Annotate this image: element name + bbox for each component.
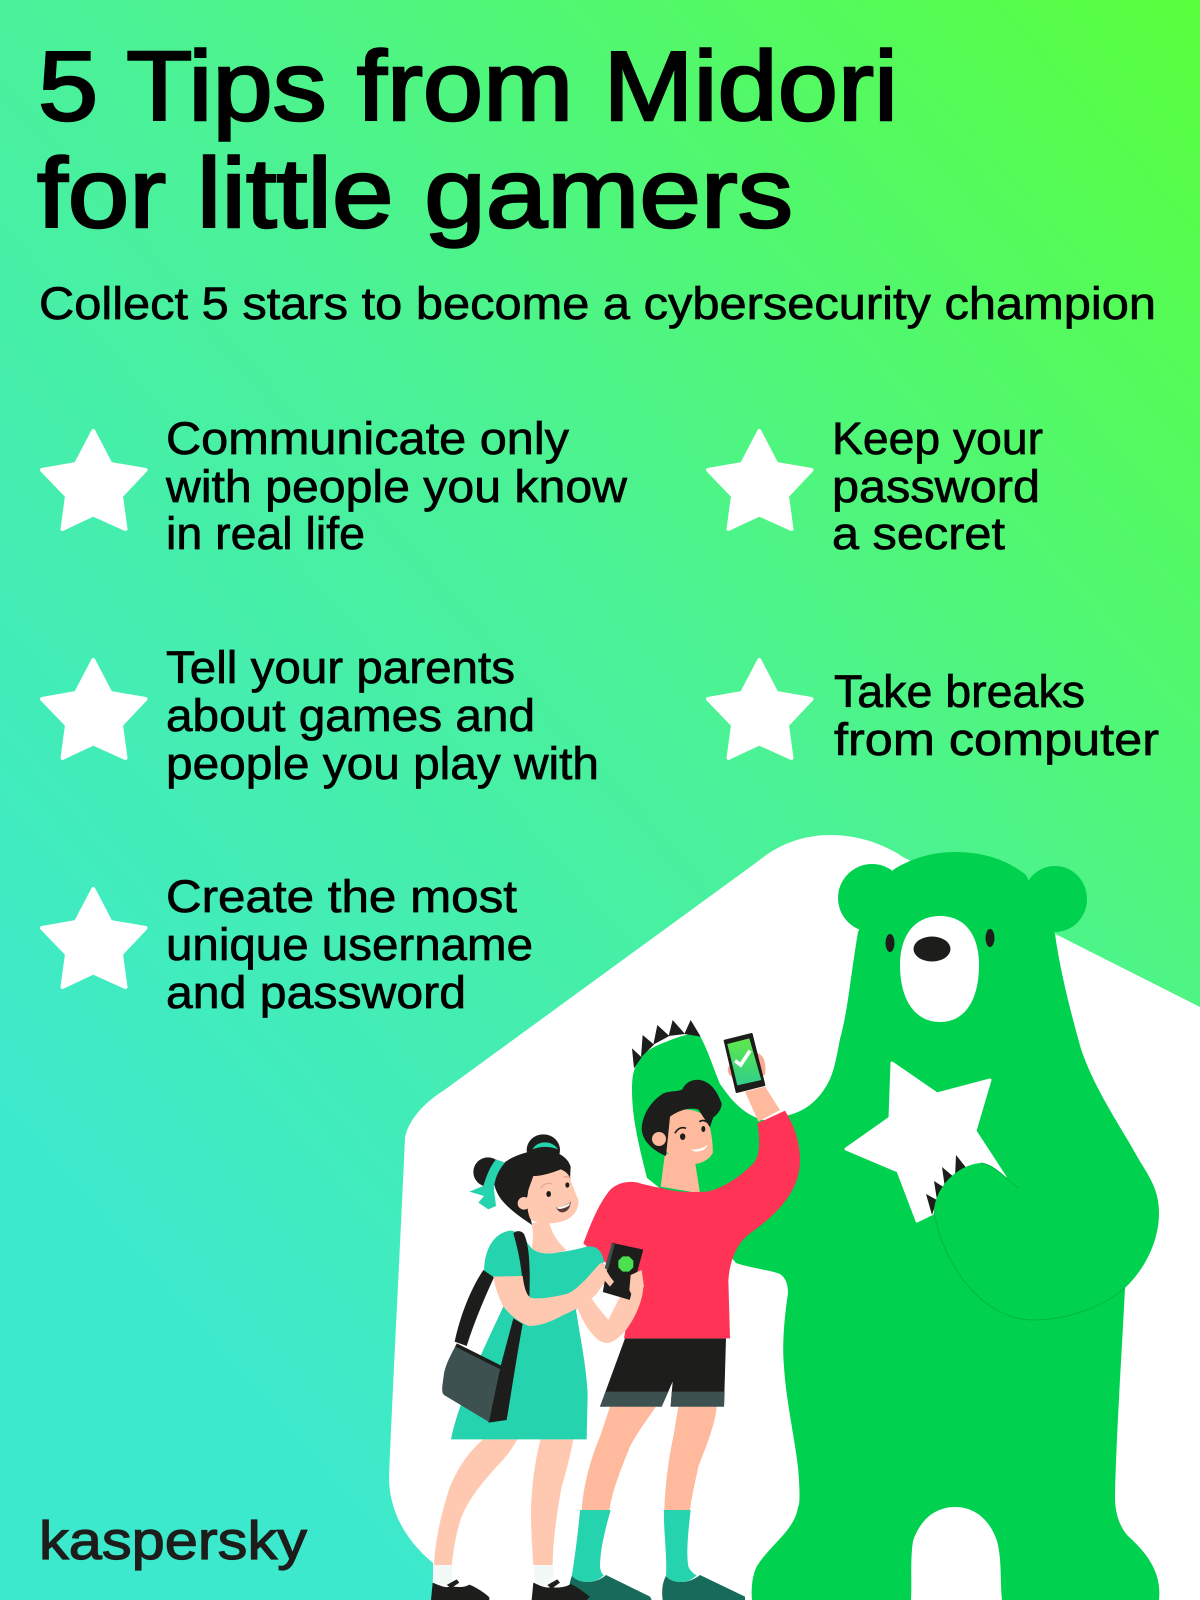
tip 1 [42,413,628,559]
tip 4 text: Keep your [832,413,1043,464]
girl hair bun [473,1157,503,1187]
tip 1 text: Communicate only [166,413,570,464]
bear claws [926,1155,968,1215]
girl right leg [531,1439,573,1565]
girl bag strap upper [455,1270,494,1346]
boy left shoe [569,1575,652,1600]
bear nose [914,936,950,962]
check mark [735,1051,750,1065]
boy right sock [664,1510,697,1582]
boy forearm [745,1087,780,1122]
bear raised hand claws [632,1020,701,1068]
phone screen [727,1038,761,1085]
girl socks [433,1565,554,1585]
girl left leg [434,1439,517,1565]
tip 2 text: Tell your parents [166,642,515,693]
tip 3 [42,871,533,1018]
girl mouth [556,1202,571,1212]
bear arm outline [934,1163,1125,1320]
girl bag strap lower [488,1318,523,1423]
boy hair [642,1080,722,1156]
boy right shoe [662,1575,745,1600]
tip 2 text: people you play with [166,738,599,789]
girl right shoe [532,1579,590,1600]
boy left sock [572,1510,611,1582]
tip 1 text: with people you know [165,461,628,512]
tip 4 text [832,413,1043,559]
boy right leg [664,1407,717,1510]
title [37,31,898,248]
hands on phone [597,1265,644,1298]
phone side edge [605,1243,615,1270]
boy face [662,1110,713,1164]
tip 5 text: from computer [834,714,1159,765]
girl hair [494,1150,571,1225]
tip 5 text [834,666,1159,765]
boy shorts cuffs [600,1392,725,1407]
boy shirt [583,1111,800,1338]
tip 4 text: password [832,461,1040,512]
icon: star [42,660,146,758]
phone body [725,1034,764,1092]
title: 5 Tips from Midori [38,31,898,141]
tip 3 text: Create the most [166,871,518,922]
kaspersky logo: kaspersky [39,1511,307,1571]
girl ear [518,1197,530,1210]
girl teeth [557,1203,570,1209]
tip 4 [708,413,1043,559]
boy smile [691,1145,707,1152]
girl bag [442,1345,500,1422]
white house shape [389,835,1200,1600]
bear snout [900,916,979,1022]
boy phone [725,1034,764,1092]
tip 2 text: about games and [166,690,535,741]
bear right ear [1023,866,1087,932]
tip 2 [42,642,599,789]
girl eyebrows [541,1177,571,1188]
boy left leg [582,1407,656,1510]
boy shorts [600,1338,726,1407]
girl neck [532,1220,567,1254]
tip 3 text [166,871,533,1018]
girl hair band [533,1142,558,1149]
icon: star [42,431,146,529]
girl bag flap edge [456,1345,501,1367]
girl phone [597,1243,644,1299]
boy ear [652,1132,666,1146]
tip 3 text: unique username [166,919,533,970]
girl face [527,1169,578,1223]
bear left eye [886,934,894,952]
bear body [632,852,1159,1600]
boy eyes [680,1126,705,1140]
phone body [603,1243,643,1299]
tip 5 text: Take breaks [834,666,1085,717]
boy neck [661,1153,700,1193]
girl near arm [493,1263,614,1326]
boy eyebrows [675,1120,707,1133]
tip 1 text: in real life [166,508,365,559]
girl left shoe [431,1579,489,1600]
boy hand [728,1053,765,1078]
icon: star [708,660,812,758]
tip 1 text [165,413,628,559]
girl dress [451,1231,604,1439]
phone logo [618,1256,633,1272]
tip 5 [708,660,1159,765]
boy [569,1034,800,1600]
tip 4 text: a secret [832,508,1006,559]
bear left ear [838,864,906,932]
girl [431,1134,644,1600]
subtitle: Collect 5 stars to become a cybersecurity champion [39,278,1156,329]
bear paw [934,1163,1060,1280]
girl shoulder strap [513,1231,530,1297]
girl ribbon [469,1159,505,1209]
icon: star [42,889,146,987]
girl far arm [577,1271,643,1343]
girl top bun [527,1134,560,1166]
bear Midori [632,852,1159,1600]
tip 3 text: and password [166,967,466,1018]
bear right eye [986,929,994,947]
icon: star [708,431,812,529]
girl eyes [546,1182,569,1197]
tip 2 text [166,642,599,789]
star held by bear [846,1063,1005,1221]
title: for little gamers [37,138,793,248]
